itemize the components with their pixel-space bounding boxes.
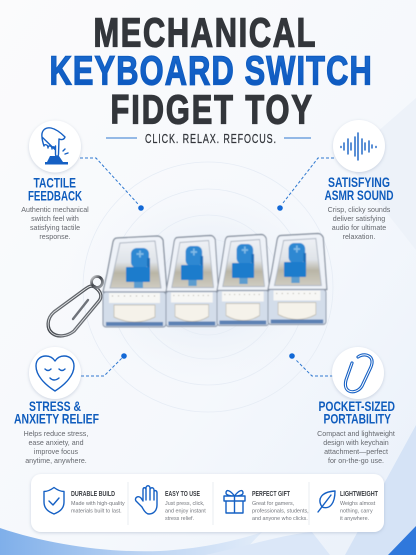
product: keychain carabiner (48, 276, 102, 336)
switch unit 1 (103, 236, 167, 327)
icon: finger pressing switch (29, 120, 81, 172)
feature: pocket-sized portability (317, 347, 395, 465)
icon: gift box (224, 491, 245, 513)
title: MECHANICAL (94, 9, 315, 56)
icon: calm heart (29, 347, 81, 399)
description: attachment—perfect (324, 448, 388, 456)
description: ease anxiety, and (28, 439, 84, 447)
heading: SATISFYING (328, 174, 390, 190)
benefit: lightweight: Weighs almost (340, 501, 376, 507)
switch unit 3 (217, 234, 269, 326)
connector: sound (277, 158, 334, 211)
icon: sound wave (333, 120, 385, 172)
benefit: perfect gift: professionals, students, (252, 508, 309, 514)
benefit: durable build: materials built to last. (71, 508, 122, 514)
title: FIDGET TOY (110, 86, 312, 133)
heading line 2: FEEDBACK (28, 188, 82, 204)
benefit: perfect gift (224, 489, 309, 522)
feature: stress and anxiety relief (14, 347, 99, 465)
connector: tactile (80, 158, 144, 211)
benefit: perfect gift: Great for gamers, (252, 501, 295, 507)
heading: TACTILE (34, 174, 76, 190)
description: improve focus (34, 448, 79, 456)
description: Authentic mechanical (21, 206, 89, 214)
heading line 2: PORTABILITY (324, 410, 391, 426)
benefit: easy to use: Just press, click, (165, 501, 205, 507)
benefit: perfect gift: and anyone who clicks. (252, 516, 308, 522)
description: deliver satisfying (333, 215, 385, 223)
benefit: durable build: DURABLE BUILD (71, 489, 115, 498)
benefit: easy to use: EASY TO USE (165, 489, 200, 498)
icon: leaf (318, 491, 335, 512)
icon: open hand (135, 486, 157, 514)
benefit: durable build (44, 488, 125, 514)
benefit: lightweight: it anywhere. (340, 516, 369, 522)
connector: stress (81, 353, 127, 376)
description: Compact and lightweight (317, 430, 395, 438)
benefit: easy to use (135, 486, 206, 522)
icon: shield (44, 488, 64, 514)
benefit: easy to use: and enjoy instant (165, 508, 206, 514)
panel: bottom benefits (31, 474, 384, 532)
description: Crisp, clicky sounds (328, 206, 391, 214)
description: Helps reduce stress, (24, 430, 88, 438)
benefit: lightweight: LIGHTWEIGHT (340, 489, 378, 498)
tagline: CLICK. RELAX. REFOCUS. (145, 133, 276, 146)
description: design with keychain (323, 439, 389, 447)
description: for on-the-go use. (328, 457, 384, 465)
description: relaxation. (343, 233, 375, 241)
feature: tactile feedback (21, 120, 89, 241)
benefit: durable build: Made with high-quality (71, 501, 125, 507)
heading: STRESS & (29, 398, 81, 414)
title (50, 9, 372, 133)
product: switch fidget toy (103, 234, 327, 327)
description: switch feel with (31, 215, 79, 223)
connector: portability (289, 353, 333, 376)
benefit: lightweight: nothing, carry (340, 508, 373, 514)
feature: satisfying asmr sound (324, 120, 394, 241)
switch unit 4 (268, 234, 327, 324)
heading line 2: ANXIETY RELIEF (14, 410, 99, 426)
title: KEYBOARD SWITCH (50, 47, 372, 94)
description: anytime, anywhere. (25, 457, 87, 465)
benefit: easy to use: stress relief. (165, 516, 194, 522)
benefit: perfect gift: PERFECT GIFT (252, 489, 290, 498)
description: satisfying tactile (30, 224, 80, 232)
description: audio for ultimate (332, 224, 386, 232)
icon: carabiner (332, 347, 384, 399)
switch unit 2 (166, 236, 218, 326)
description: response. (39, 233, 71, 241)
benefit: lightweight (318, 489, 378, 522)
